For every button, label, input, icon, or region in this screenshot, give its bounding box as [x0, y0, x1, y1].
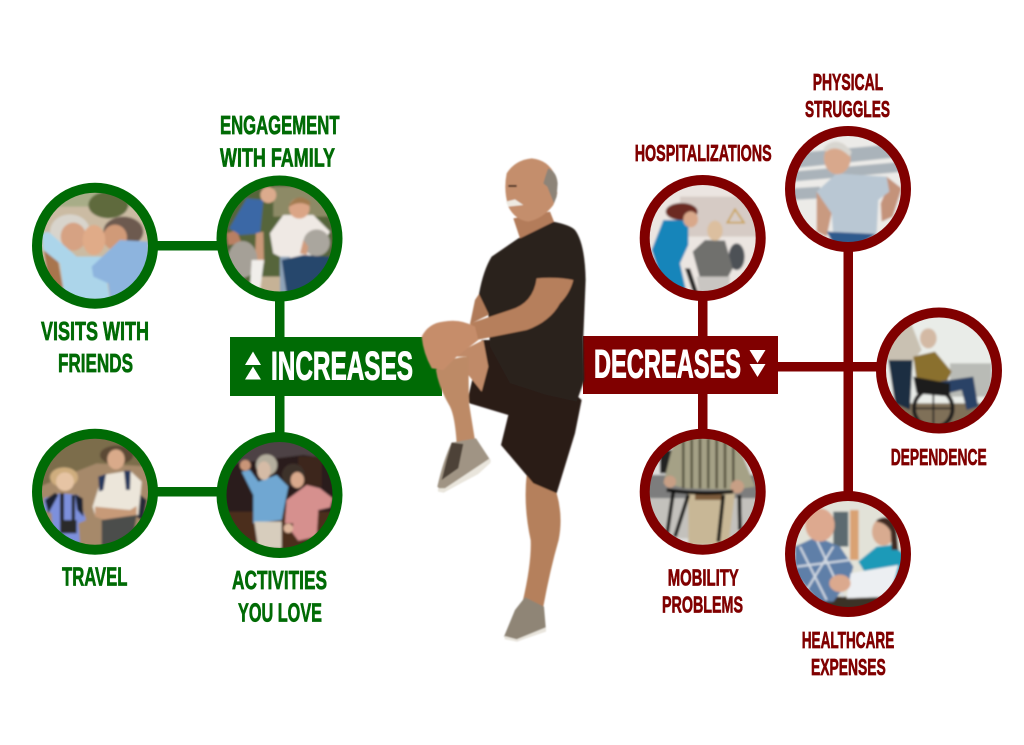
photo circle: healthcare expenses [790, 496, 906, 612]
label: physical struggles: PHYSICAL [813, 69, 883, 95]
connector lines: decreases [698, 189, 940, 554]
label: healthcare expenses [802, 627, 894, 680]
label: visits with friends [41, 316, 149, 378]
label: visits with friends: FRIENDS [58, 348, 133, 378]
label: travel: TRAVEL [62, 561, 128, 591]
label: activities you love: ACTIVITIES [232, 565, 327, 595]
label: healthcare expenses: HEALTHCARE [802, 627, 894, 653]
label: engagement with family: ENGAGEMENT [220, 110, 340, 140]
label: mobility problems: PROBLEMS [662, 592, 743, 618]
label: engagement with family [220, 110, 340, 172]
photo circle: visits with friends [37, 188, 153, 304]
banner: decreases [583, 336, 778, 394]
photo circle: engagement with family [222, 180, 338, 297]
label: engagement with family: WITH FAMILY [220, 142, 335, 172]
photo circle: hospitalizations [645, 180, 761, 297]
photo circle: physical struggles [790, 131, 906, 247]
photo circle: dependence [881, 312, 997, 430]
photo circle: travel [37, 434, 153, 550]
label: activities you love: YOU LOVE [238, 598, 322, 628]
connector lines: increases [95, 238, 284, 496]
label: mobility problems [662, 565, 743, 618]
label: mobility problems: MOBILITY [668, 565, 739, 591]
label: physical struggles: STRUGGLES [805, 96, 890, 122]
banner: increases: INCREASES [271, 344, 413, 388]
central figure: man stretching on one leg [422, 158, 586, 642]
banner: increases [230, 337, 442, 396]
photo circle: mobility problems [645, 434, 761, 550]
banner: decreases: DECREASES [594, 342, 741, 386]
label: hospitalizations: HOSPITALIZATIONS [635, 140, 772, 166]
photo circle: activities you love [222, 437, 338, 553]
label: activities you love [232, 565, 327, 628]
label: healthcare expenses: EXPENSES [811, 654, 886, 680]
label: visits with friends: VISITS WITH [41, 316, 149, 346]
label: physical struggles [805, 69, 890, 122]
